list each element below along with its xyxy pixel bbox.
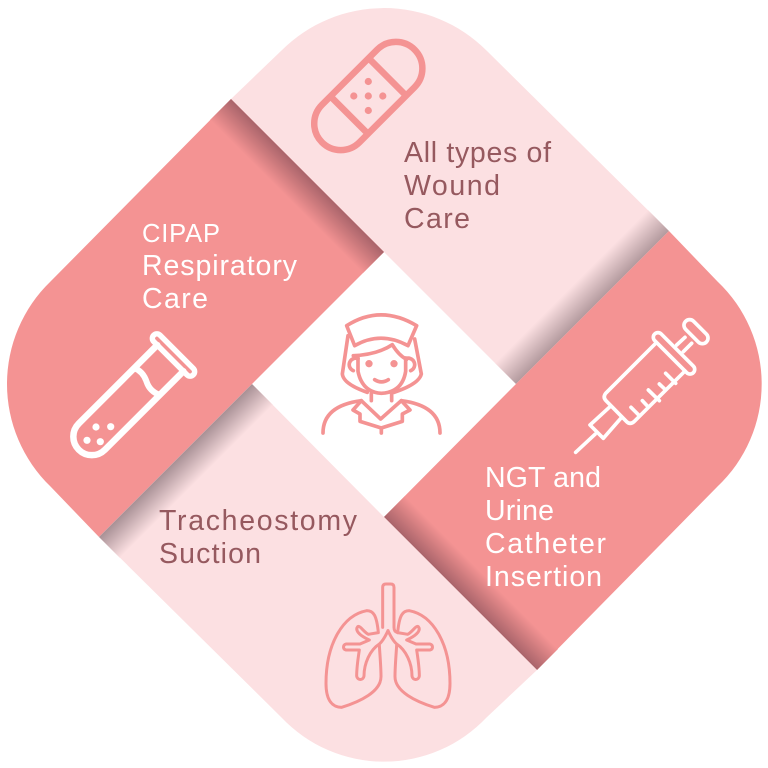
label: wound care: All types of	[404, 137, 551, 169]
icon: nurse	[323, 315, 440, 433]
panel shape	[7, 99, 384, 537]
label: respiratory care	[142, 220, 298, 315]
label: respiratory care: CIPAP	[142, 220, 220, 248]
icon: lungs	[326, 584, 450, 707]
icon: syringe	[576, 317, 710, 452]
panel: respiratory care	[7, 99, 384, 537]
label: catheter insertion: Insertion	[485, 561, 602, 593]
label: tracheostomy suction: Tracheostomy	[159, 505, 358, 537]
panel shadow	[99, 384, 273, 558]
label: tracheostomy suction: Suction	[159, 538, 261, 570]
label: wound care	[404, 137, 551, 235]
panel shadow	[384, 496, 558, 670]
panel: wound care	[231, 8, 669, 384]
panel shape	[231, 8, 669, 384]
label: respiratory care: Respiratory	[142, 250, 298, 282]
label: wound care: Care	[404, 203, 470, 235]
panel shape	[99, 384, 537, 762]
label: catheter insertion: Catheter	[485, 528, 606, 560]
label: catheter insertion: NGT and	[485, 462, 601, 494]
label: wound care: Wound	[404, 170, 500, 202]
label: tracheostomy suction	[159, 505, 358, 570]
label: catheter insertion	[485, 462, 606, 593]
icon: bandage	[303, 31, 433, 161]
label: respiratory care: Care	[142, 283, 208, 315]
panel shadow	[210, 99, 384, 273]
panel shadow	[495, 210, 669, 384]
panel: tracheostomy suction	[99, 384, 537, 762]
panel shape	[384, 231, 762, 670]
panel: catheter insertion	[384, 231, 762, 670]
icon: test tube	[59, 332, 196, 470]
label: catheter insertion: Urine	[485, 495, 554, 527]
